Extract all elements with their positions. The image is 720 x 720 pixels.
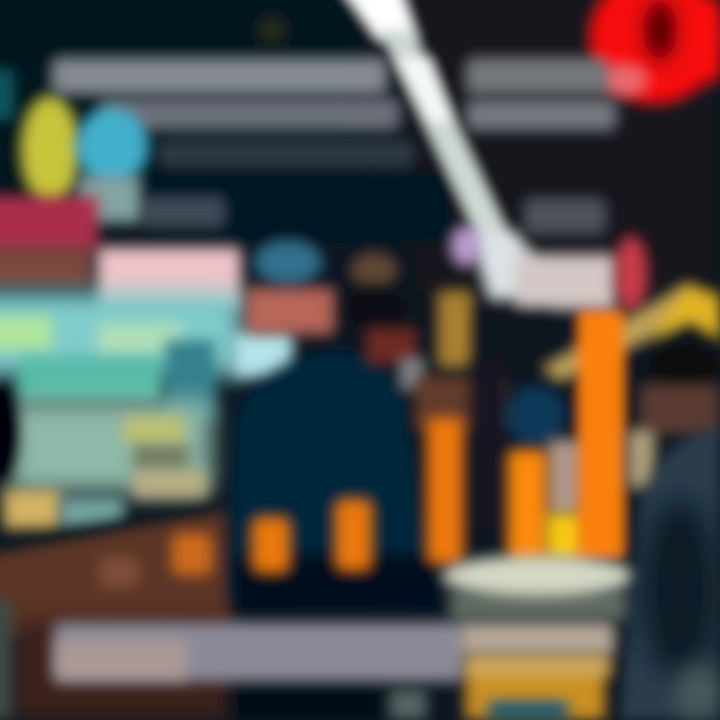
yellow highlight: [546, 513, 584, 559]
title block, illegible blurred text: [52, 58, 616, 234]
market stall, left: [0, 96, 292, 528]
bar chart, orange bars: [172, 310, 624, 575]
subtitle line: [158, 140, 414, 168]
wooden counter: [0, 500, 232, 720]
white diagonal arrow streak: [335, 0, 647, 312]
bar 6: [578, 310, 624, 558]
title line 1: [52, 58, 387, 94]
small label right: [524, 198, 606, 234]
backdrop stall, centre: [246, 240, 334, 334]
white bowl: [442, 556, 634, 620]
yellow box, bottom: [234, 660, 604, 720]
person, right, with yellow hat: [620, 286, 720, 720]
title line 2: [100, 98, 400, 130]
small label left: [142, 196, 226, 228]
caption bar, illegible blurred text: [54, 623, 614, 681]
person, centre: [228, 252, 440, 610]
arrow base: [470, 232, 560, 300]
bar 1: [172, 533, 212, 575]
bar 5: [508, 450, 547, 560]
bar 2: [252, 517, 290, 573]
bar 4: [427, 418, 463, 564]
red circle badge: [590, 0, 720, 103]
people behind bars: [415, 284, 720, 532]
bar 3: [335, 499, 372, 571]
